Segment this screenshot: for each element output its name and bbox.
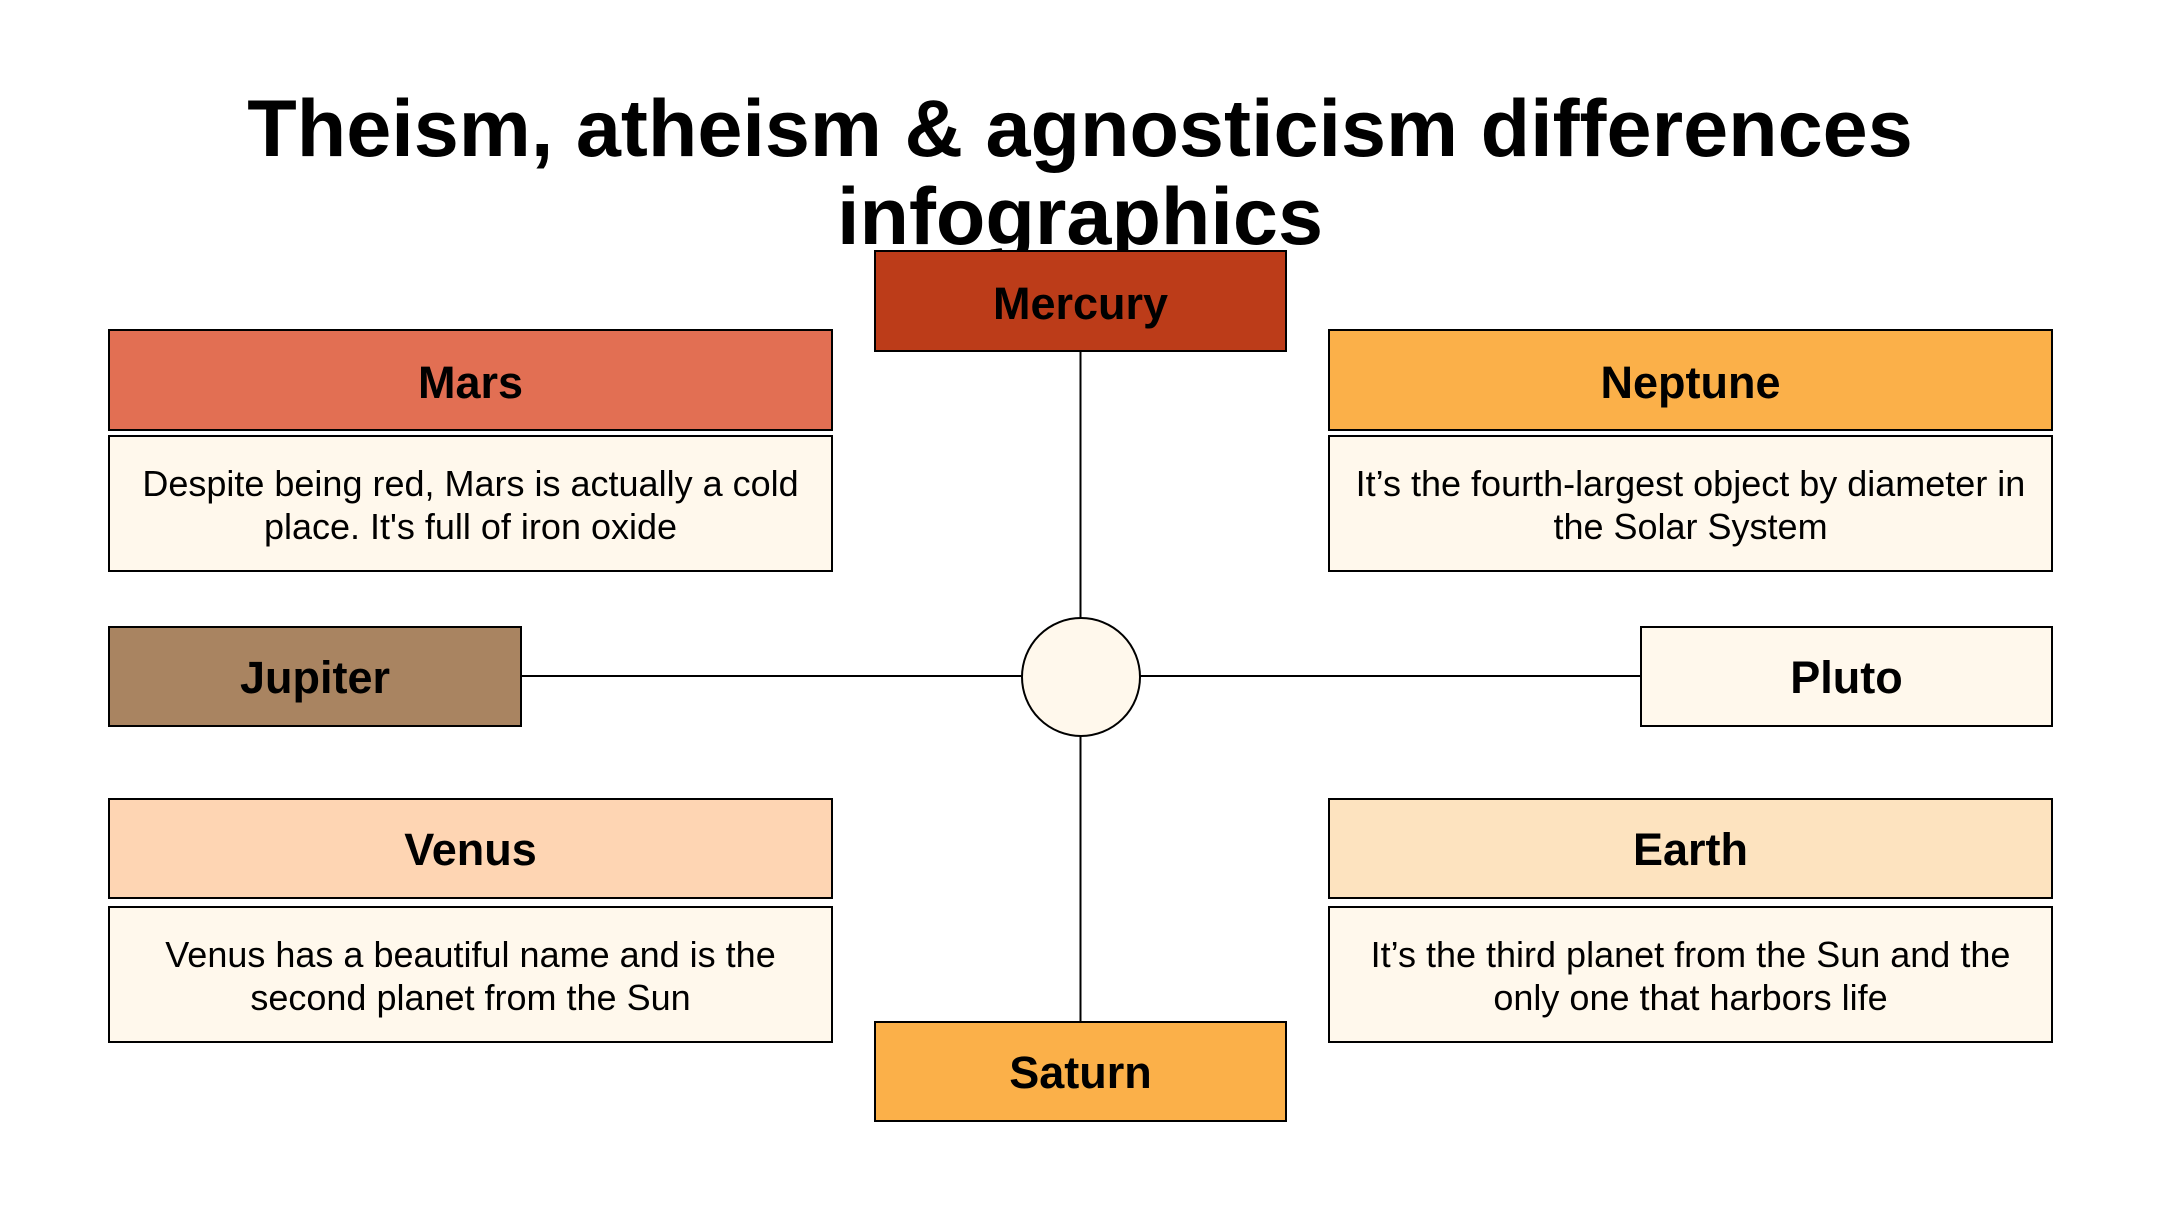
node: Mercury: Mercury	[993, 278, 1168, 328]
heading: Earth	[1328, 798, 2053, 899]
node: Jupiter	[108, 626, 522, 727]
text: Earth: only one that harbors life	[1493, 976, 1888, 1018]
text: Venus: second planet from the Sun	[250, 976, 691, 1018]
heading: Venus: Venus	[404, 824, 537, 875]
text: Neptune: the Solar System	[1553, 506, 1828, 546]
text: Earth	[1328, 906, 2053, 1043]
heading: Earth: Earth	[1633, 824, 1748, 875]
title: Theism, atheism & agnosticism differences	[247, 84, 1913, 174]
text: Neptune	[1328, 435, 2053, 572]
title	[247, 84, 1913, 262]
text: Earth: It’s the third planet from the Sun and the	[1371, 934, 2010, 974]
node: Pluto: Pluto	[1790, 652, 1903, 703]
node: Mercury	[874, 250, 1287, 352]
heading: Venus	[108, 798, 833, 899]
text: Venus: Venus has a beautiful name and is the	[165, 934, 776, 974]
heading: Mars	[108, 329, 833, 431]
heading: Neptune: Neptune	[1600, 356, 1780, 408]
text: Neptune: It’s the fourth-largest object by diameter in	[1356, 462, 2025, 504]
node: Jupiter: Jupiter	[240, 652, 390, 703]
heading: Neptune	[1328, 329, 2053, 431]
text: Venus	[108, 906, 833, 1043]
title: infographics	[837, 172, 1323, 262]
text: Mars: Despite being red, Mars is actually a cold	[142, 462, 799, 504]
text: Mars: place. It's full of iron oxide	[264, 506, 677, 546]
heading: Mars: Mars	[418, 356, 523, 408]
center circle	[1021, 617, 1141, 737]
node: Saturn: Saturn	[1009, 1047, 1152, 1098]
node: Saturn	[874, 1021, 1287, 1122]
text: Mars	[108, 435, 833, 572]
node: Pluto	[1640, 626, 2053, 727]
